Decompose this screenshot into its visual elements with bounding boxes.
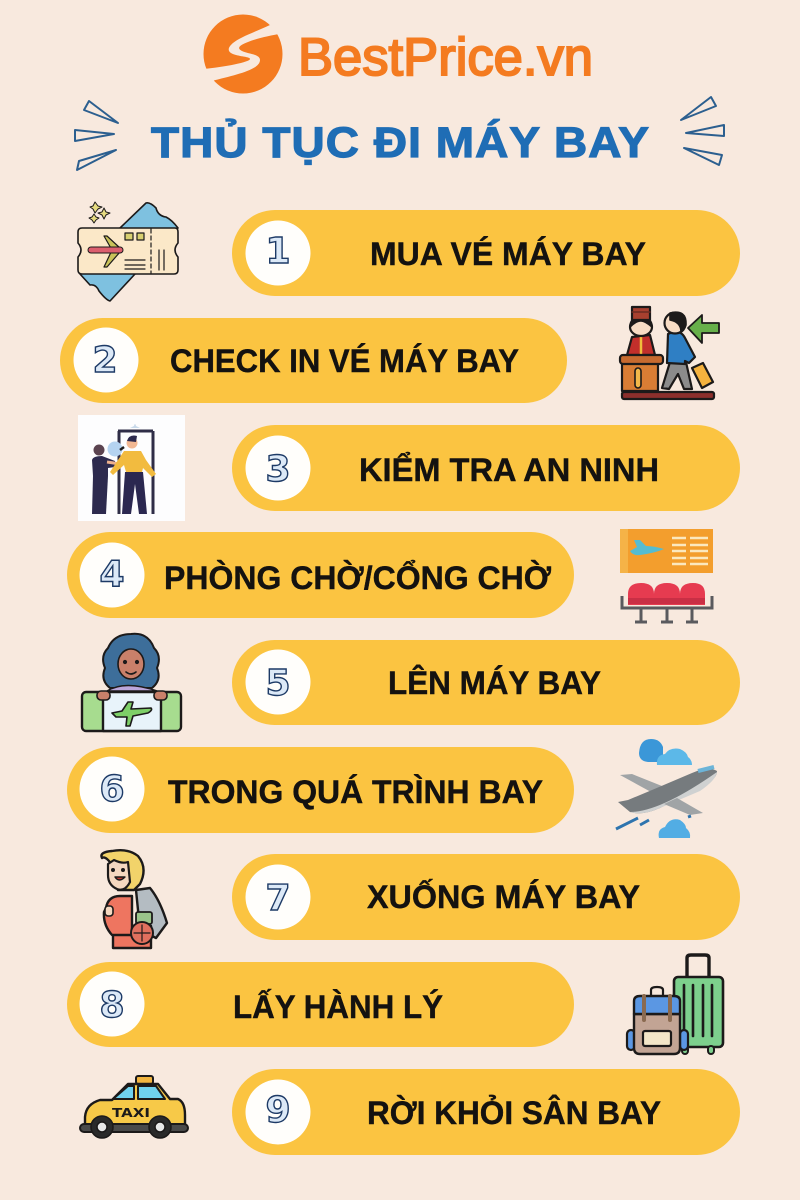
step number 9: 9 — [265, 1090, 291, 1131]
icon: plane ticket — [78, 202, 178, 301]
icon: traveller with backpack — [101, 850, 167, 948]
step 1 pill — [232, 210, 740, 296]
step number 6: 6 — [99, 769, 125, 810]
step label: PHÒNG CHỜ/CỔNG CHỜ — [164, 560, 552, 596]
icon: plane in flight with clouds — [616, 739, 717, 838]
step label: LÊN MÁY BAY — [388, 665, 601, 701]
icon: taxi — [80, 1076, 188, 1138]
step label: TRONG QUÁ TRÌNH BAY — [168, 774, 543, 810]
step 8 pill — [67, 962, 574, 1047]
step label: KIỂM TRA AN NINH — [359, 452, 659, 488]
step number 1: 1 — [265, 231, 291, 272]
icon: security scan — [78, 415, 185, 521]
step number 5: 5 — [265, 663, 291, 704]
step number 3: 3 — [265, 449, 291, 490]
step number 7: 7 — [265, 878, 291, 919]
step 4 pill — [67, 532, 574, 618]
step label: CHECK IN VÉ MÁY BAY — [170, 343, 519, 379]
step 2 pill — [60, 318, 567, 403]
decoration: left sparks — [75, 101, 118, 170]
step label: MUA VÉ MÁY BAY — [370, 236, 646, 272]
step 5 pill — [232, 640, 740, 725]
icon: check-in counter — [620, 307, 719, 399]
step number 2: 2 — [92, 340, 118, 381]
step 6 pill — [67, 747, 574, 833]
icon: logo S circle — [203, 14, 284, 94]
step label: RỜI KHỎI SÂN BAY — [367, 1095, 661, 1131]
step label: LẤY HÀNH LÝ — [233, 989, 443, 1025]
taxi door text: TAXI — [112, 1106, 150, 1120]
step number 4: 4 — [99, 554, 125, 595]
step 3 pill — [232, 425, 740, 511]
logo: BestPrice.vn — [203, 14, 593, 94]
step 9 pill — [232, 1069, 740, 1155]
logo wordmark: BestPrice.vn — [298, 28, 593, 87]
title: THỦ TỤC ĐI MÁY BAY — [151, 118, 650, 167]
step 7 pill — [232, 854, 740, 940]
icon: woman holding boarding sign — [82, 634, 181, 731]
decoration: right sparks — [681, 97, 724, 165]
step number 8: 8 — [99, 985, 125, 1026]
icon: luggage — [627, 955, 723, 1054]
step label: XUỐNG MÁY BAY — [367, 879, 640, 915]
icon: waiting room board and seats — [620, 529, 713, 622]
